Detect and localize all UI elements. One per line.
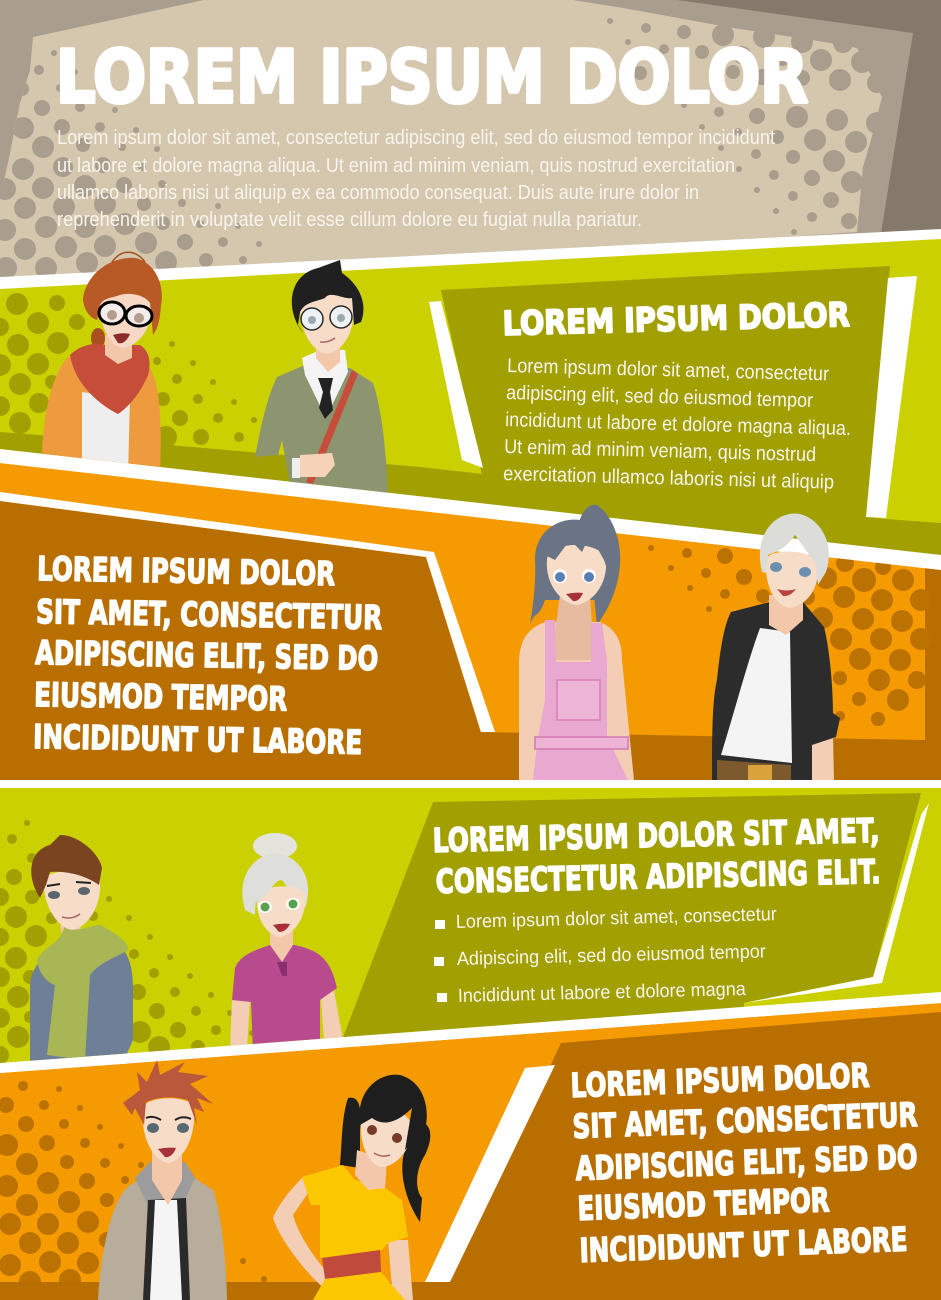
panel: top taupe header bbox=[0, 0, 941, 300]
halftone dots bbox=[0, 820, 255, 1064]
brown text box bbox=[0, 501, 481, 733]
character: girl with black pigtails and yellow dress bbox=[273, 1075, 430, 1300]
character: boy with white hair and black jacket bbox=[712, 513, 840, 780]
brown ground bbox=[0, 1282, 941, 1300]
white frame strip bbox=[744, 803, 929, 1003]
white band top bbox=[0, 229, 941, 289]
halftone dots bbox=[0, 50, 262, 279]
panel: green band 1 bbox=[0, 238, 941, 560]
character: boy with glasses and green cardigan bbox=[255, 260, 388, 495]
bullet list: band 3: Incididunt ut labore et dolore magna bbox=[458, 979, 746, 1007]
heading: band 4 bbox=[570, 1056, 918, 1270]
intro paragraph bbox=[57, 127, 775, 231]
white frame strip left bbox=[429, 301, 483, 468]
intro paragraph: reprehenderit in voluptate velit esse cillum dolore eu fugiat nulla pariatur. bbox=[57, 209, 642, 231]
title: LOREM IPSUM DOLOR bbox=[56, 35, 808, 119]
paragraph: band 1: adipiscing elit, sed do eiusmod tempor bbox=[506, 382, 814, 412]
panel: green band 3 bbox=[0, 788, 941, 1064]
character: girl with glasses and scarf bbox=[42, 252, 162, 475]
brown side bbox=[925, 568, 941, 780]
white band lower bbox=[0, 992, 941, 1073]
bullet list: band 3 bbox=[434, 904, 778, 1007]
heading: band 2: LOREM IPSUM DOLOR bbox=[37, 549, 335, 593]
panel: orange band 4 bbox=[0, 1003, 941, 1300]
character: girl with ponytail and pink overalls bbox=[519, 505, 634, 780]
halftone dots bbox=[0, 1081, 267, 1293]
character: boy with red spiky hair and beige jacket bbox=[98, 1060, 227, 1300]
heading: band 2: SIT AMET, CONSECTETUR bbox=[36, 592, 382, 637]
intro paragraph: ut labore et dolore magna aliqua. Ut enim ad minim veniam, quis nostrud exercitation bbox=[57, 155, 735, 177]
intro paragraph: ullamco laboris nisi ut aliquip ex ea commodo consequat. Duis aute irure dolor in bbox=[57, 182, 699, 204]
panel: orange band 2 bbox=[0, 463, 941, 780]
brown ground bbox=[0, 730, 941, 780]
bullet list: band 3: Adipiscing elit, sed do eiusmod tempor bbox=[457, 941, 767, 970]
paragraph: band 1 bbox=[503, 355, 851, 494]
white slash bbox=[425, 1065, 555, 1282]
divider white gutter bbox=[0, 780, 941, 788]
character: boy with brown hair and green scarf bbox=[30, 835, 133, 1065]
white chevron bbox=[0, 492, 495, 732]
dark corner bbox=[677, 0, 941, 240]
character: woman with white bun and magenta polo bbox=[230, 833, 343, 1052]
halftone dots bbox=[0, 293, 257, 448]
intro paragraph: Lorem ipsum dolor sit amet, consectetur adipiscing elit, sed do eiusmod tempor incididunt bbox=[57, 127, 775, 149]
heading: band 2: ADIPISCING ELIT, SED DO bbox=[35, 633, 378, 678]
olive ground bbox=[0, 432, 941, 560]
heading: band 1: LOREM IPSUM DOLOR bbox=[502, 295, 850, 343]
heading: band 3 bbox=[432, 811, 881, 901]
heading: band 4: EIUSMOD TEMPOR bbox=[577, 1180, 830, 1228]
paragraph: band 1: exercitation ullamco laboris nisi ut aliquip bbox=[503, 463, 834, 494]
paragraph: band 1: Ut enim ad minim veniam, quis nostrud bbox=[504, 436, 816, 466]
white frame strip right bbox=[866, 276, 917, 518]
brown text box bbox=[430, 1012, 941, 1300]
paragraph: band 1: incididunt ut labore et dolore magna aliqua. bbox=[505, 409, 851, 440]
heading: band 2 bbox=[33, 549, 382, 762]
paragraph: band 1: Lorem ipsum dolor sit amet, consectetur bbox=[507, 355, 830, 385]
white band middle bbox=[0, 449, 941, 570]
bullet list: band 3: Lorem ipsum dolor sit amet, consectetur bbox=[456, 904, 778, 933]
olive text box bbox=[441, 266, 890, 530]
olive text box bbox=[342, 793, 921, 1040]
heading: band 2: INCIDIDUNT UT LABORE bbox=[33, 717, 362, 762]
halftone dots bbox=[648, 545, 932, 726]
light shape bbox=[0, 0, 882, 292]
heading: band 2: EIUSMOD TEMPOR bbox=[34, 675, 288, 718]
